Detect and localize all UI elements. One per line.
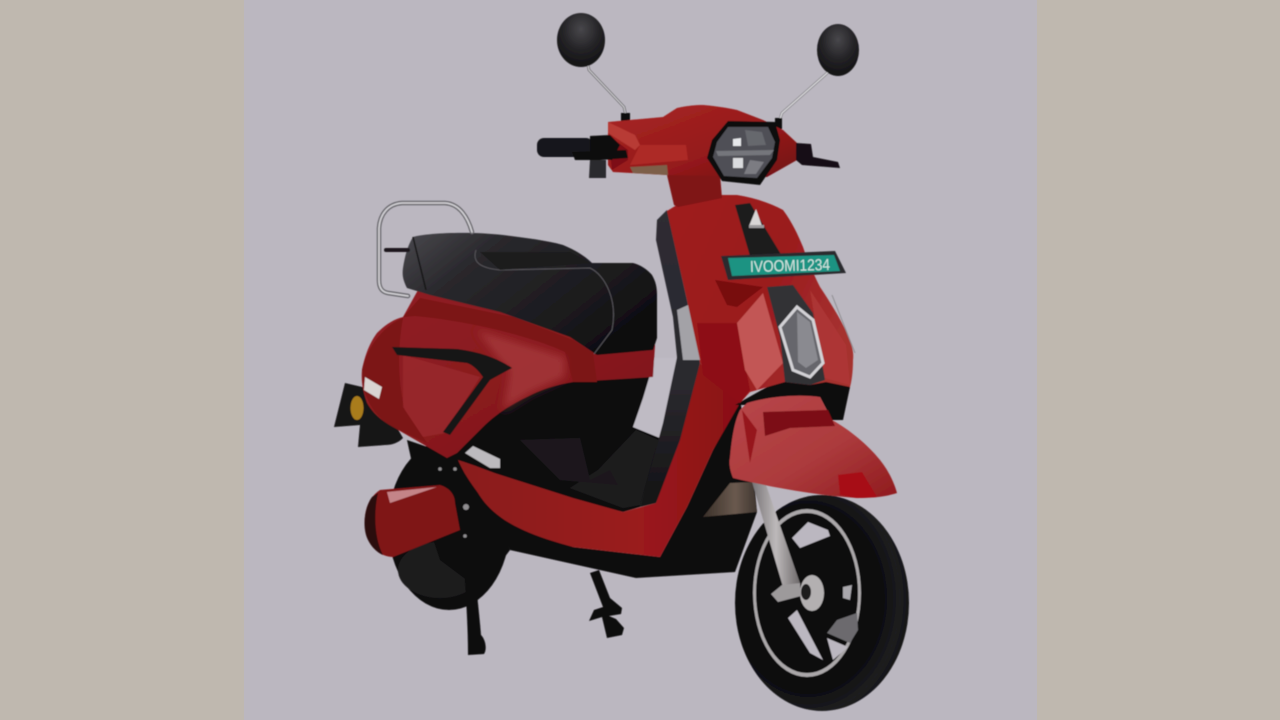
front fender (729, 396, 897, 498)
scooter (334, 13, 909, 711)
body highlight (477, 330, 565, 410)
black leg shield stripe (640, 210, 700, 507)
seat (403, 233, 657, 355)
rear number plate and reflector (334, 383, 403, 447)
right edge highlight (810, 290, 850, 385)
chrome rear rail (379, 203, 472, 296)
headset fairing (608, 105, 797, 177)
side reflector light (465, 444, 507, 472)
background gap behind leg shield (633, 358, 677, 438)
brake disc (827, 613, 858, 643)
left mirror stem (587, 60, 630, 128)
central black strip (735, 203, 782, 256)
brand logo (749, 209, 762, 226)
right mirror (817, 24, 859, 76)
shadow below plate (715, 280, 763, 307)
body centre panel (403, 355, 480, 437)
chrome side trim line (832, 295, 855, 353)
body left shade (362, 318, 427, 443)
gaps between spokes (792, 522, 830, 548)
rear red cylinder cover (365, 485, 460, 557)
right mirror stem (775, 67, 834, 129)
rear wheel (388, 440, 510, 610)
brand tag (364, 377, 382, 399)
left handlebar grip and lever (537, 135, 628, 178)
suspension bolts (438, 467, 469, 538)
centre stand (589, 570, 624, 638)
steering column (667, 175, 722, 207)
floor pan texture (570, 430, 658, 508)
logo wordmark bar (749, 225, 764, 228)
hub (800, 575, 824, 611)
front wheel tyre (735, 495, 909, 711)
rear body panel (362, 290, 655, 458)
arch shadow under front panel (735, 375, 850, 420)
rim (753, 509, 861, 677)
front fork (752, 482, 800, 587)
side stand (462, 545, 486, 655)
body upper crease band (403, 298, 597, 382)
headlight (707, 121, 780, 185)
salmon highlight (737, 293, 783, 390)
front indicator cluster (767, 285, 825, 385)
backdrop: lilac-grey centre panel (244, 0, 1037, 720)
left mirror (557, 13, 605, 67)
swingarm and rear suspension (407, 440, 510, 590)
darker side facet (697, 323, 750, 403)
front number plate (721, 251, 846, 280)
underbody black (495, 400, 757, 578)
lower red body (458, 363, 740, 557)
front panel (667, 195, 853, 403)
side vent (392, 347, 512, 435)
right handlebar lever (796, 143, 840, 168)
brown shadow panel behind fender (703, 482, 757, 517)
plate text: IVOOMI1234 (750, 257, 830, 276)
side LED strip (677, 305, 700, 360)
floor pan dark well (458, 370, 660, 512)
fork axle clamp (771, 583, 801, 602)
